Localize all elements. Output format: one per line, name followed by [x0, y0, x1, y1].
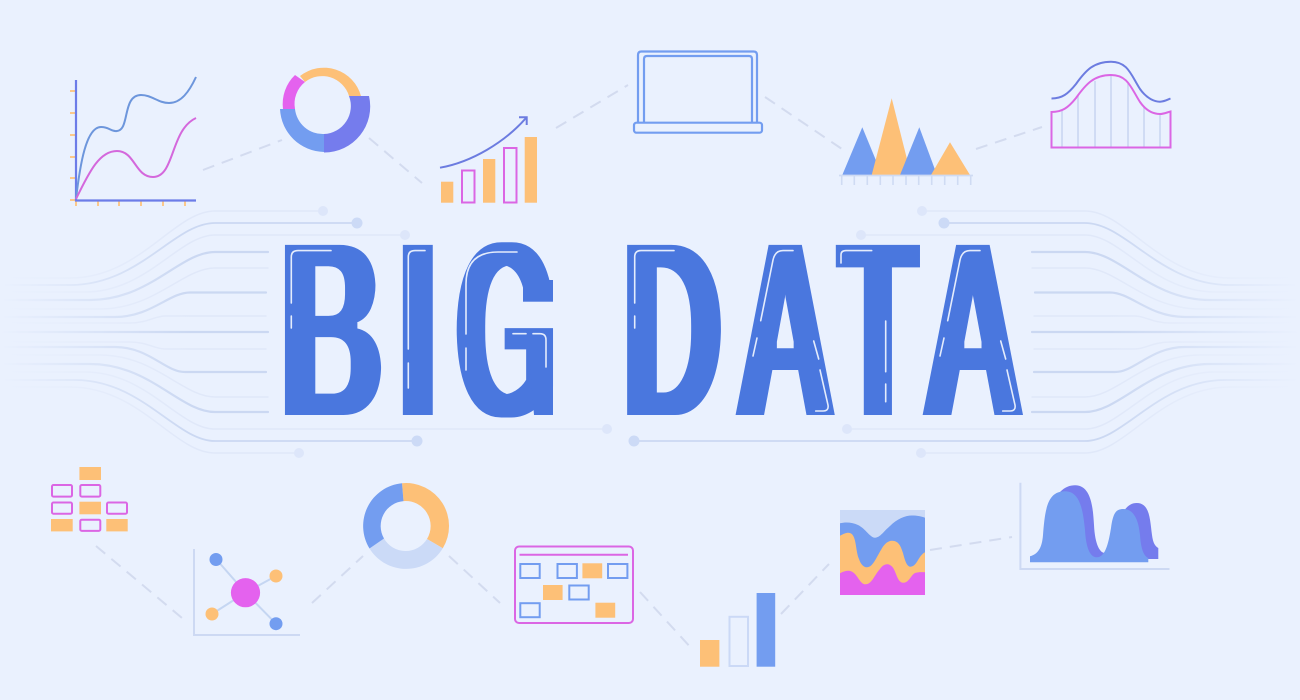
title: BIG DATA: I	[399, 187, 437, 473]
title: BIG DATA: A	[736, 187, 835, 473]
icon: three bars	[700, 593, 775, 667]
icon: overlapping wave chart	[1020, 483, 1170, 569]
title: BIG DATA: B	[280, 186, 383, 472]
icon: laptop	[634, 52, 762, 133]
title highlight strokes	[291, 251, 1015, 411]
dashed connectors	[96, 85, 1042, 650]
icon: line chart	[70, 77, 196, 206]
title: BIG DATA	[280, 186, 1023, 473]
circuit end dots	[294, 206, 950, 458]
icon: bell curve chart	[1052, 62, 1170, 148]
icon: calendar board	[515, 546, 633, 623]
title: BIG DATA: G	[456, 187, 556, 472]
icon: network scatter plot	[194, 549, 300, 635]
icon: growth bar chart with arrow	[440, 117, 537, 203]
icon: donut chart top	[280, 68, 370, 153]
icon: triangle chart	[839, 98, 973, 185]
icon: stacked area chart	[840, 510, 925, 595]
title: BIG DATA: T	[839, 186, 916, 473]
icon: donut chart bottom	[363, 483, 449, 569]
title: BIG DATA: D	[623, 187, 722, 473]
icon: block grid	[51, 467, 128, 531]
title: BIG DATA: A	[923, 187, 1023, 473]
left circuit lines	[0, 211, 607, 453]
right circuit lines	[634, 211, 1300, 453]
